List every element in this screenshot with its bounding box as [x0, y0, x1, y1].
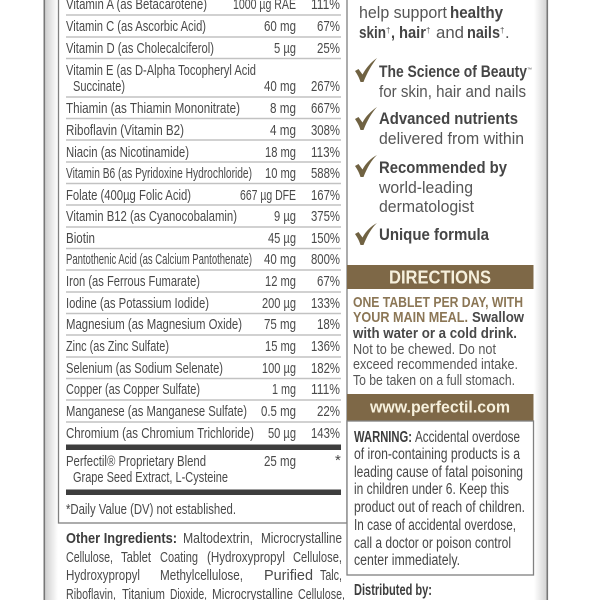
text block: directions: YOUR MAIN MEAL.: [353, 309, 468, 326]
text block: directions: To be taken on a full stomach.: [353, 372, 515, 389]
text block: benefit intro: †: [500, 26, 504, 35]
panel: warning box: leading cause of fatal poisoning: [354, 464, 523, 481]
text block: benefit intro: †: [426, 26, 430, 35]
row: Thiamin: 8 mg: [270, 100, 296, 117]
row: Vitamin C: 67%: [317, 18, 340, 35]
row: Vitamin B12: 375%: [311, 208, 340, 225]
row: Vitamin B6: 588%: [311, 165, 340, 182]
row: Vitamin B6: 10 mg: [265, 165, 296, 182]
checklist item: advanced nutrients: Advanced nutrients: [379, 110, 518, 128]
icon: check mark: [355, 155, 377, 177]
row: Zinc: 15 mg: [265, 338, 296, 355]
row: proprietary blend: Grape Seed Extract, L-Cysteine: [73, 469, 228, 486]
row: Magnesium: 18%: [317, 316, 340, 333]
text block: benefit intro: hair: [399, 24, 427, 42]
row: Iodine: Iodine (as Potassium Iodide): [66, 295, 209, 312]
text block: other ingredients: Purified: [264, 567, 313, 584]
panel: warning box: of iron-containing products is a: [354, 446, 520, 463]
row: Chromium: Chromium (as Chromium Trichloride): [66, 425, 254, 442]
row: Vitamin C: 60 mg: [264, 18, 296, 35]
row: Folate: 667 µg DFE: [240, 187, 296, 204]
row: Manganese: 22%: [317, 403, 340, 420]
row: Copper: 111%: [311, 381, 340, 398]
text block: directions: [352, 294, 524, 389]
row: Chromium: 50 µg: [268, 425, 296, 442]
checklist item: advanced nutrients: delivered from within: [379, 130, 524, 148]
text block: distributed by: Distributed by:: [354, 582, 432, 599]
text block: other ingredients: Talc,: [320, 567, 342, 584]
row: Iodine: [66, 295, 340, 312]
panel: warning box: center immediately.: [354, 552, 460, 569]
checklist item: unique formula: Unique formula: [379, 226, 490, 244]
text block: other ingredients: Other Ingredients:: [66, 530, 177, 547]
text block: directions: ONE TABLET PER DAY, WITH: [353, 294, 523, 311]
row: Niacin: 18 mg: [265, 144, 296, 161]
text block: other ingredients: Hydroxypropyl: [66, 567, 140, 584]
text block: other ingredients: (Hydroxypropyl: [207, 549, 285, 566]
text block: benefit intro: skin: [359, 24, 386, 42]
text block: other ingredients: Methylcellulose,: [160, 567, 243, 584]
row: Pantothenic Acid: Pantothenic Acid (as Calcium Pantothenate): [66, 251, 252, 268]
text block: other ingredients: Microcrystalline: [261, 530, 342, 547]
row: Manganese: 0.5 mg: [261, 403, 296, 420]
checklist item: unique formula: [355, 223, 490, 245]
bottle right edge shading: [534, 0, 548, 600]
text block: benefit intro: help support: [359, 4, 447, 22]
row: Biotin: [66, 230, 340, 247]
row: Niacin: Niacin (as Nicotinamide): [66, 144, 189, 161]
row: Biotin: 45 µg: [268, 230, 296, 247]
row: Copper: [66, 381, 340, 398]
row: Niacin: 113%: [311, 144, 340, 161]
panel: supplement facts table: [58, 0, 347, 523]
text block: other ingredients: Coating: [160, 549, 198, 566]
row: Vitamin E: 267%: [311, 78, 340, 95]
row: Pantothenic Acid: 40 mg: [264, 251, 296, 268]
row: Selenium: 100 µg: [262, 360, 296, 377]
row: Manganese: Manganese (as Manganese Sulfate): [66, 403, 247, 420]
text block: other ingredients: Cellulose,: [293, 549, 342, 566]
text block: directions: with water or a cold drink.: [352, 325, 517, 342]
text block: benefit intro: .: [505, 24, 510, 42]
text block: benefit intro: [359, 4, 510, 42]
row: Zinc: Zinc (as Zinc Sulfate): [66, 338, 169, 355]
row: Biotin: 150%: [311, 230, 340, 247]
row: Magnesium: Magnesium (as Magnesium Oxide): [66, 316, 242, 333]
banner: website: www.perfectil.com: [369, 398, 510, 416]
row: Riboflavin: 308%: [311, 122, 340, 139]
row: Folate: 167%: [311, 187, 340, 204]
row: Selenium: Selenium (as Sodium Selenate): [66, 360, 223, 377]
text block: benefit intro: healthy: [450, 4, 504, 22]
footnote: daily value: *Daily Value (DV) not established.: [66, 501, 236, 518]
row: Vitamin B12: Vitamin B12 (as Cyanocobalamin): [66, 208, 237, 225]
text block: benefit intro: and: [436, 24, 464, 42]
row: Folate: [66, 187, 340, 204]
panel: warning box: call a doctor or poison control: [354, 535, 511, 552]
checklist item: science of beauty: ™: [527, 67, 532, 73]
row: Vitamin C: [66, 18, 340, 35]
text block: directions: exceed recommended intake.: [353, 356, 518, 373]
row: Riboflavin: [66, 122, 340, 139]
row: Vitamin E: Vitamin E (as D-Alpha Tocopheryl Acid: [66, 62, 256, 79]
checklist item: science of beauty: for skin, hair and nails: [379, 83, 526, 101]
row: Zinc: [66, 338, 340, 355]
icon: check mark: [355, 58, 377, 82]
row: proprietary blend: 25 mg: [264, 453, 296, 470]
heading: directions banner: DIRECTIONS: [389, 268, 491, 288]
row: Folate: Folate (400µg Folic Acid): [66, 187, 191, 204]
row: Iodine: 200 µg: [262, 295, 296, 312]
row: proprietary blend: *: [335, 452, 341, 469]
text block: other ingredients: Maltodextrin,: [183, 530, 253, 547]
row: Vitamin C: Vitamin C (as Ascorbic Acid): [66, 18, 206, 35]
row: Thiamin: 667%: [311, 100, 340, 117]
text block: directions: Swallow: [472, 309, 524, 326]
row: Vitamin B12: 9 µg: [274, 208, 296, 225]
text block: other ingredients: Tablet: [121, 549, 152, 566]
checklist item: recommended: [355, 155, 508, 216]
row: Zinc: 136%: [311, 338, 340, 355]
checklist item: recommended: Recommended by: [379, 159, 508, 177]
row: Vitamin E: [66, 62, 340, 95]
text block: other ingredients: [66, 530, 345, 600]
panel: warning box: [347, 421, 534, 575]
row: Riboflavin: 4 mg: [270, 122, 296, 139]
row: Vitamin E: 40 mg: [264, 78, 296, 95]
row: Vitamin B6: Vitamin B6 (as Pyridoxine Hydrochloride): [66, 165, 252, 182]
row: Thiamin: Thiamin (as Thiamin Mononitrate): [66, 100, 240, 117]
row: Iron: 67%: [317, 273, 340, 290]
panel: warning box: Accidental overdose: [415, 429, 520, 446]
checklist item: science of beauty: [355, 58, 532, 101]
checklist item: advanced nutrients: [355, 107, 524, 148]
row: Vitamin D: Vitamin D (as Cholecalciferol): [66, 40, 214, 57]
row: Chromium: 143%: [311, 425, 340, 442]
row: Niacin: [66, 144, 340, 161]
row: Magnesium: 75 mg: [264, 316, 296, 333]
row: Pantothenic Acid: 800%: [311, 251, 340, 268]
row: Riboflavin: Riboflavin (Vitamin B2): [66, 122, 184, 139]
text block: benefit intro: †: [386, 26, 390, 35]
heading: directions banner: [347, 265, 534, 289]
row: proprietary blend: [66, 452, 341, 486]
panel: warning box: In case of accidental overdose,: [354, 517, 516, 534]
row: Iron: 12 mg: [265, 273, 296, 290]
checklist item: recommended: world-leading: [378, 179, 473, 197]
row: Vitamin E: Succinate): [73, 78, 125, 95]
row: Copper: 1 mg: [272, 381, 296, 398]
row: Biotin: Biotin: [66, 230, 95, 247]
checklist item: science of beauty: The Science of Beauty: [379, 63, 528, 81]
row: proprietary blend: Perfectil® Proprietary Blend: [66, 453, 206, 470]
panel: warning box: WARNING:: [354, 429, 412, 446]
banner: website: [347, 394, 534, 421]
row: Vitamin D: 5 µg: [274, 40, 296, 57]
checklist item: recommended: dermatologist: [379, 198, 474, 216]
row: Iron: [66, 273, 340, 290]
icon: check mark: [355, 223, 377, 245]
panel: warning box: in children under 6. Keep this: [354, 481, 509, 498]
text block: other ingredients: Cellulose,: [66, 549, 113, 566]
row: Vitamin A: [66, 0, 340, 13]
panel: warning box: product out of reach of children.: [354, 499, 525, 516]
row: Iodine: 133%: [311, 295, 340, 312]
text block: benefit intro: nails: [467, 24, 500, 42]
bottle left edge shading: [44, 0, 58, 600]
icon: check mark: [355, 107, 377, 130]
row: Selenium: 182%: [311, 360, 340, 377]
text block: directions: Not to be chewed. Do not: [353, 341, 497, 358]
text block: benefit intro: ,: [391, 24, 395, 42]
row: Copper: Copper (as Copper Sulfate): [66, 381, 200, 398]
row: Vitamin D: 25%: [317, 40, 340, 57]
row: Iron: Iron (as Ferrous Fumarate): [66, 273, 200, 290]
